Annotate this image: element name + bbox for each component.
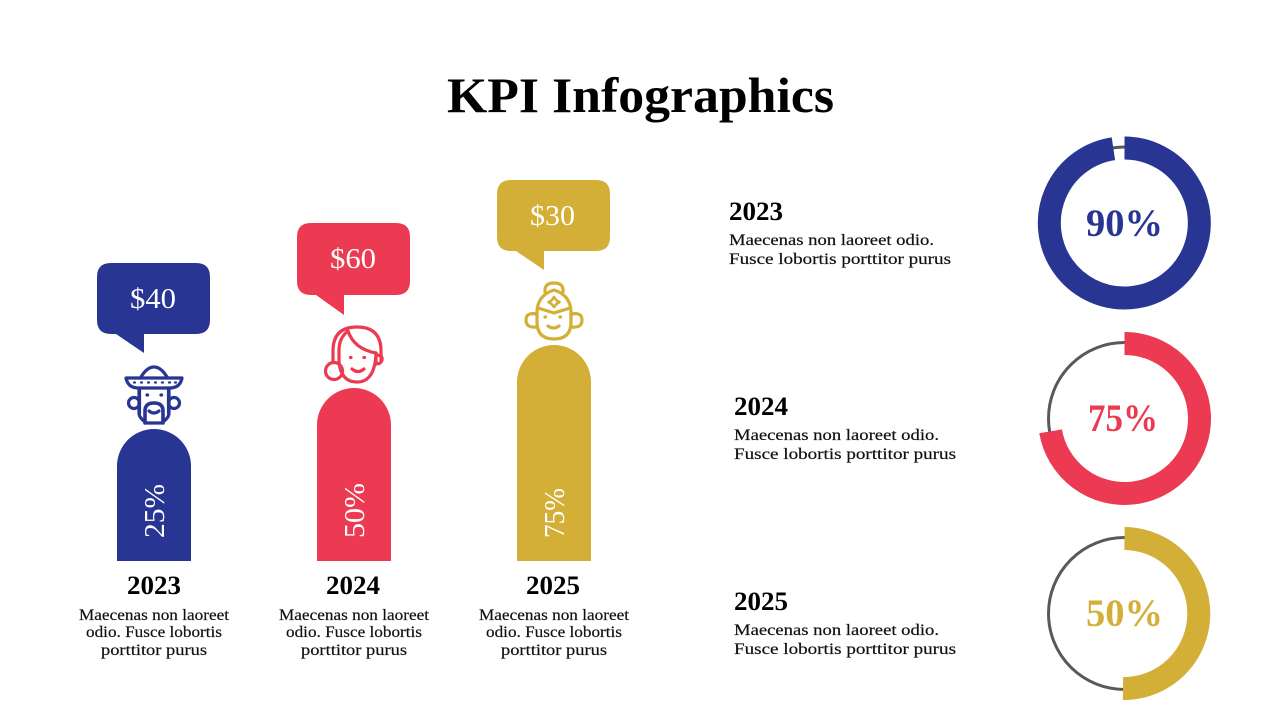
description [479, 607, 630, 659]
speech bubble: $30 [497, 180, 610, 270]
description [734, 427, 956, 463]
year label: 2023 [729, 197, 783, 226]
panel: bar column 2023 [79, 263, 230, 659]
year label: 2025 [734, 587, 788, 616]
donut chart: 75% [1048, 342, 1200, 494]
year label: 2024 [734, 392, 788, 421]
description: Fusce lobortis porttitor purus [729, 251, 951, 268]
icon: woman [326, 327, 382, 382]
speech bubble: $60: $60 [330, 243, 376, 275]
donut chart: 75%: 75% [1088, 397, 1158, 440]
year label: 2023 [127, 571, 181, 600]
panel: KPI row 2024 [734, 342, 1200, 494]
description: odio. Fusce lobortis [486, 624, 622, 641]
speech bubble: $40: $40 [130, 283, 176, 315]
description: porttitor purus [301, 642, 407, 659]
donut chart: 90% [1048, 147, 1200, 299]
description: odio. Fusce lobortis [86, 624, 222, 641]
donut chart: 50%: 50% [1086, 592, 1163, 635]
panel: bar column 2025 [479, 180, 630, 659]
description: porttitor purus [101, 642, 207, 659]
description [729, 232, 951, 268]
title: KPI Infographics [447, 67, 834, 123]
year label: 2025 [526, 571, 580, 600]
bar: 75% [517, 345, 591, 561]
panel: KPI row 2023 [729, 147, 1200, 299]
description: odio. Fusce lobortis [286, 624, 422, 641]
description: Maecenas non laoreet [279, 607, 430, 624]
speech bubble: $30: $30 [530, 200, 575, 232]
bar: 50% [317, 388, 391, 561]
description: Fusce lobortis porttitor purus [734, 641, 956, 658]
description: Fusce lobortis porttitor purus [734, 446, 956, 463]
description: Maecenas non laoreet [479, 607, 630, 624]
speech bubble: $60 [297, 223, 410, 315]
icon: man with hat [126, 367, 182, 423]
description: Maecenas non laoreet odio. [729, 232, 934, 249]
description: Maecenas non laoreet odio. [734, 427, 939, 444]
panel: bar column 2024 [279, 223, 430, 659]
description [734, 622, 956, 658]
description: Maecenas non laoreet [79, 607, 230, 624]
speech bubble: $40 [97, 263, 210, 353]
year label: 2024 [326, 571, 380, 600]
bar: 50%: 50% [339, 483, 371, 538]
description [279, 607, 430, 659]
panel: KPI row 2025 [734, 538, 1200, 690]
bar: 25% [117, 429, 191, 561]
icon: woman with headdress [526, 283, 582, 339]
donut chart: 50% [1048, 538, 1200, 690]
description: porttitor purus [501, 642, 607, 659]
bar: 25%: 25% [139, 484, 171, 538]
description [79, 607, 230, 659]
donut chart: 90%: 90% [1086, 202, 1163, 245]
bar: 75%: 75% [539, 488, 571, 538]
description: Maecenas non laoreet odio. [734, 622, 939, 639]
